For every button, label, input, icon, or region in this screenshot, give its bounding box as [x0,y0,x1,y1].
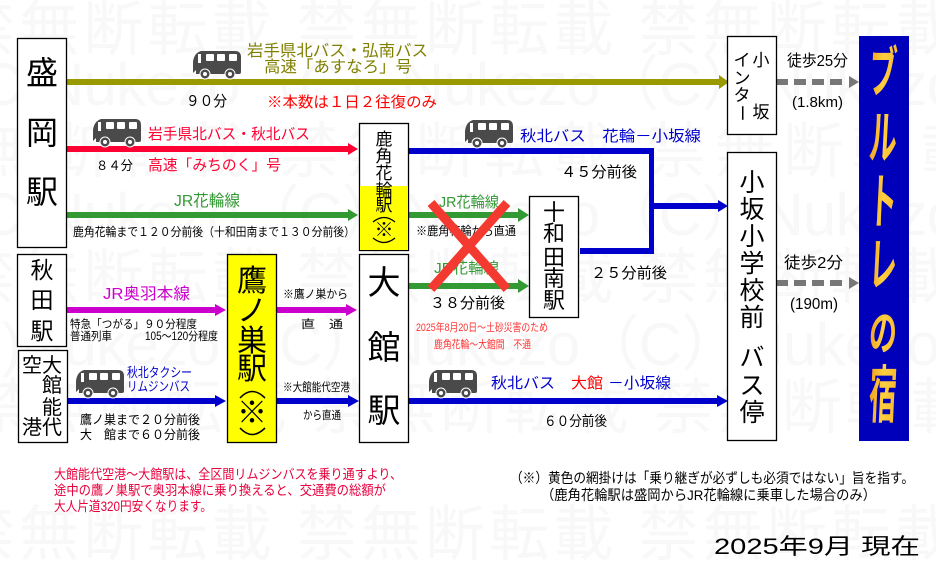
label: Ou line times: 特急「つがる」９０分程度 [70,317,197,331]
station: Odate [360,254,408,442]
stop: Kosaka Interchange: 小 [752,51,770,70]
label: Shuhoku bus Odate-Kosaka: 秋北バス [491,375,555,392]
label: Shuhoku taxi limousine bus: 秋北タクシー [127,365,192,380]
stop: Kosaka Elementary School bus stop: 坂 [739,196,765,224]
date stamp: 現在 [861,534,920,559]
label: Hanawa line upper segment: JR花輪線 [439,194,499,211]
route: blue limousine bus [67,395,728,407]
stop: Kosaka Elementary School bus stop: バ [739,344,765,372]
station: Akita: 駅 [30,318,54,344]
stop: Kosaka Elementary School bus stop: 校 [739,277,765,305]
station: Odate: 駅 [368,392,400,429]
notice: landslide closure [416,320,548,351]
station: Takanosu: ※ [237,397,267,430]
label: Michinoku bus: 岩手県北バス・秋北バス [148,126,310,143]
note: only two round trips: ※本数は１日２往復のみ [267,94,437,111]
station: Kazuno-Hanawa: ※ [374,220,394,241]
label: Hanawa line time: 鹿角花輪まで１２０分前後（十和田南まで１３０分前後） [73,224,355,239]
station: Odate-Noshiro Airport: 能 [42,396,62,419]
label: walk 2 minutes: 徒歩2分 [784,254,843,272]
station: Odate-Noshiro Airport: 代 [42,416,62,439]
bus icon 5 [429,370,477,398]
station: Towada-Minami: 南 [543,266,565,291]
station: Morioka: 岡 [26,115,58,151]
station: Towada-Minami [530,196,578,318]
label: 45 minutes: ４５分前後 [561,164,637,181]
station: Takanosu: 巣 [237,325,267,358]
station: Kazuno-Hanawa: 駅 [376,196,392,215]
label: through from Takanosu: 直 通 [301,317,344,331]
station: Morioka [18,38,66,248]
label: Shuhoku bus Hanawa-Kosaka: 秋北バス 花輪－小坂線 [520,128,701,145]
label: Ou line times [70,317,218,343]
label: through from Takanosu: ※鷹ノ巣から [283,288,348,301]
label: 60 minutes: ６０分前後 [544,413,607,429]
bus icon 3 [465,120,513,148]
station: Odate: 館 [368,329,400,366]
label: 90 minutes: ９０分 [186,93,227,110]
bus icon 2 [93,119,141,147]
destination: Blue Train inn: レ [867,233,899,298]
label: Shuhoku bus Odate-Kosaka: －小坂線 [608,375,671,392]
station: Towada-Minami: 駅 [543,288,565,313]
date stamp: 2025年9月 [714,534,853,559]
note: yellow shading legend [510,470,914,503]
route: green JR Hanawa line to Towada-Minami lower [408,279,529,293]
stop: Kosaka Interchange: ー [732,104,751,122]
station: Towada-Minami: 十 [543,200,565,225]
destination: Blue Train inn: の [867,307,899,361]
label: 190 m: (190m) [790,296,838,313]
station: Odate-Noshiro Airport: 空 [22,354,42,377]
date stamp [714,534,920,559]
station: Towada-Minami: 和 [543,221,565,246]
walking arrow lower [777,277,859,289]
stop: Kosaka Elementary School bus stop: 停 [739,399,765,427]
destination: Blue Train inn: ト [867,169,899,236]
note: fare saving: 大館能代空港～大館駅は、全区間リムジンバスを乗り通すより、 [54,467,402,482]
label: Shuhoku taxi limousine bus [127,365,192,394]
station: Towada-Minami: 田 [543,245,565,270]
label: Asunaro bus [247,42,428,76]
stop: Kosaka Interchange: イ [734,51,750,70]
station: Akita [18,254,66,346]
route: olive highway bus to Kosaka IC [66,75,729,89]
stop: Kosaka Elementary School bus stop: 小 [739,169,765,197]
label: 25 minutes: ２５分前後 [591,265,667,282]
route: magenta JR Ou line [66,304,357,316]
station: Kazuno-Hanawa: 角 [376,147,392,166]
label: through service: ※鹿角花輪から直通 [416,223,516,238]
station: Takanosu: 鷹 [237,265,267,298]
stop: Kosaka Interchange: ン [734,69,750,88]
label: Michinoku bus [148,126,310,174]
stop: Kosaka Interchange [728,36,776,134]
stop: Kosaka Elementary School bus stop [728,152,776,440]
label: Ou line times: 105～120分程度 [145,330,218,343]
bus icon 1 [193,51,241,79]
label: through from airport: ※大館能代空港 [283,380,350,394]
station: Morioka: 盛 [26,55,58,91]
label: through from Takanosu [283,288,348,331]
label: Shuhoku bus Odate-Kosaka [491,375,671,392]
station: Takanosu [228,254,276,442]
note: fare saving [54,467,402,514]
stop: Kosaka Elementary School bus stop: 前 [739,304,765,332]
station: Odate-Noshiro Airport: 港 [22,416,42,439]
label: Michinoku bus: 高速「みちのく」号 [148,157,281,174]
route: green JR Hanawa line to Towada-Minami upper [408,208,529,222]
station: Odate: 大 [368,264,400,301]
station: Odate-Noshiro Airport: 大 [42,354,62,377]
station: Kazuno-Hanawa: 鹿 [376,130,392,149]
station: Morioka: 駅 [26,174,58,210]
label: Shuhoku bus Odate-Kosaka: 大館 [571,375,603,392]
station: Odate-Noshiro Airport: 館 [42,374,62,397]
station: Kazuno-Hanawa: 花 [376,164,392,183]
destination: Blue Train inn: 宿 [867,362,899,431]
walking arrow upper [777,76,859,88]
route: blue bus Hanawa to Kosaka [408,148,728,254]
note: yellow shading legend: （鹿角花輪駅は盛岡からJR花輪線に乗車した場合のみ） [541,487,876,503]
label: through from airport [283,380,350,422]
station: Kazuno-Hanawa [360,124,408,250]
stop: Kosaka Elementary School bus stop: 小 [739,223,765,251]
destination: Blue Train inn: ブ [867,43,899,105]
label: Asunaro bus: 岩手県北バス・弘南バス [247,42,428,60]
note: fare saving: 途中の鷹ノ巣駅で奥羽本線に乗り換えると、交通費の総額が [54,483,386,498]
stop: Kosaka Elementary School bus stop: ス [739,372,765,400]
station: Takanosu: ノ [237,295,267,328]
label: JR Ou main line: JR奥羽本線 [103,285,190,303]
stop: Kosaka Interchange: 坂 [752,103,770,122]
label: Hanawa line lower segment: JR花輪線 [434,260,499,277]
station: Odate-Noshiro Airport [18,350,68,442]
stop: Kosaka Interchange: タ [734,86,750,105]
notice: landslide closure: 2025年8月20日～土砂災害のため [416,320,548,334]
bus icon 4 [76,370,124,398]
label: through from airport: から直通 [303,408,341,422]
station: Kazuno-Hanawa: 輪 [376,181,392,200]
route: green JR Hanawa line to Kazuno-Hanawa [66,209,358,221]
label: limousine times: 鷹ノ巣まで２０分前後 [80,412,200,427]
route: red highway bus to Kazuno-Hanawa [66,143,358,155]
label: limousine times [80,412,200,442]
station: Akita: 秋 [30,257,54,283]
label: Asunaro bus: 高速「あすなろ」号 [264,58,412,76]
label: 38 minutes: ３８分前後 [430,295,505,312]
stop: Kosaka Elementary School bus stop: 学 [739,250,765,278]
note: fare saving: 大人片道320円安くなります。 [54,499,212,514]
label: JR Hanawa line: JR花輪線 [174,192,240,210]
destination: Blue Train inn: ル [867,106,899,171]
label: 84 minutes: ８４分 [96,158,133,173]
station: Takanosu: 駅 [237,353,267,386]
label: limousine times: 大 館まで６０分前後 [80,427,200,442]
label: Shuhoku taxi limousine bus: リムジンバス [127,379,190,394]
closure cross [431,203,507,289]
notice: landslide closure: 鹿角花輪～大館間 不通 [434,337,531,351]
label: 1.8 km: (1.8km) [792,94,843,111]
label: Ou line times: 普通列車 [70,329,112,343]
destination: Blue Train inn [859,36,909,441]
station: Akita: 田 [30,287,54,313]
label: walk 25 minutes: 徒歩25分 [787,52,848,70]
